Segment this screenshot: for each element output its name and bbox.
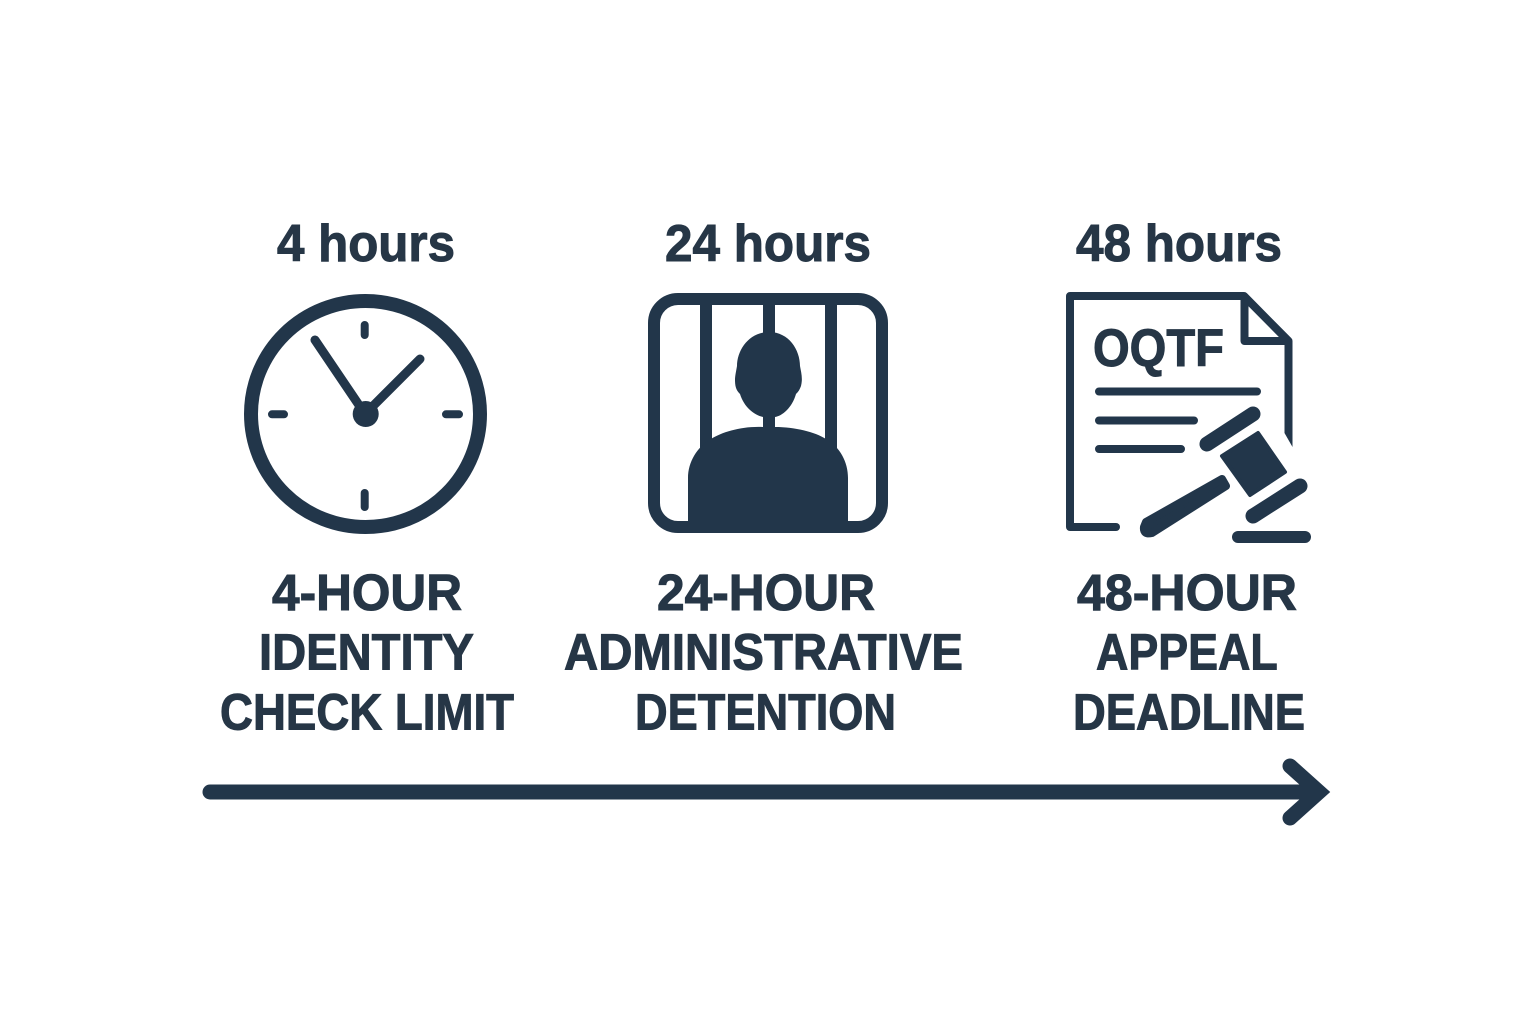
label: 48-hour appeal deadline: 48-HOUR [1077, 564, 1297, 621]
panel: 24-hour administrative detention [564, 215, 977, 740]
panel: 48-hour appeal deadline [1070, 215, 1311, 740]
label: 24-hour administrative detention: ADMINISTRATIVE [564, 624, 963, 680]
arrow: timeline [210, 766, 1319, 818]
label: 24-hour administrative detention: 24-HOUR [657, 564, 875, 621]
panel: 4-hour identity check [220, 215, 514, 740]
heading: 4 hours: 4 hours [277, 215, 455, 273]
label: 4-hour identity check limit: IDENTITY [259, 624, 474, 680]
icon: OQTF document with gavel [1070, 296, 1305, 537]
heading: 24 hours: 24 hours [665, 215, 871, 273]
label: 48-hour appeal deadline: DEADLINE [1073, 684, 1305, 740]
label: 4-hour identity check limit: CHECK LIMIT [220, 684, 514, 740]
icon: person behind bars [654, 299, 882, 530]
icon: OQTF document with gavel: OQTF [1093, 319, 1224, 378]
label: 48-hour appeal deadline: APPEAL [1096, 624, 1277, 680]
heading: 48 hours: 48 hours [1076, 215, 1282, 273]
icon: clock [251, 301, 480, 527]
label: 4-hour identity check limit: 4-HOUR [272, 564, 462, 621]
label: 24-hour administrative detention: DETENTION [635, 684, 896, 740]
